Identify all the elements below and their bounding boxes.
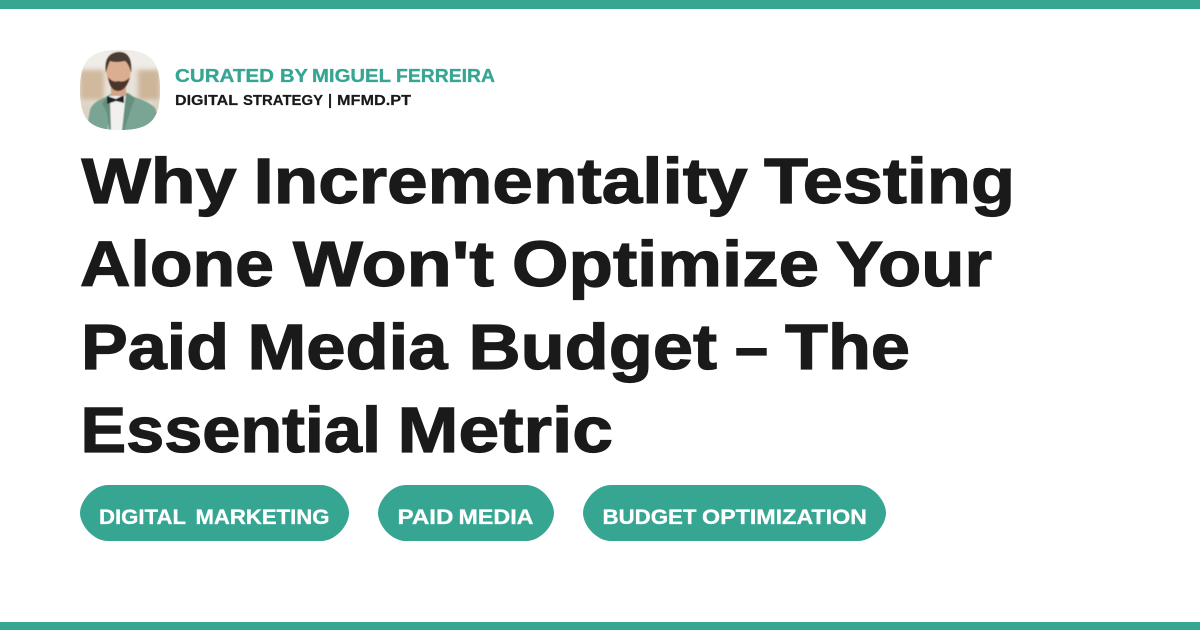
title: The [785,311,910,383]
tag: budget optimization: OPTIMIZATION [702,505,867,529]
tag: digital marketing: MARKETING [196,505,330,529]
title: Your [836,228,992,300]
title: Testing [764,145,1015,217]
title: Why [82,145,237,217]
curator name: FERREIRA [396,65,495,86]
top accent bar [0,0,1200,9]
title: Budget [468,311,717,383]
title: Metric [398,394,613,466]
bottom accent bar [0,622,1200,630]
title: Won't [293,228,494,300]
tag: budget optimization [583,485,886,541]
title: Alone [80,228,274,300]
curator name: MIGUEL [312,65,391,86]
curator name [175,65,495,86]
tag: digital marketing: DIGITAL [99,505,186,529]
title: Paid [81,311,229,383]
tag: budget optimization: BUDGET [602,505,696,529]
curator name: CURATED [175,65,274,86]
icon: author portrait [80,50,160,131]
curator role [175,93,411,109]
title: Essential [80,394,381,466]
tag: paid media [378,485,554,541]
tag: digital marketing [80,485,349,541]
curator role: MFMD.PT [337,93,411,109]
curator name: BY [280,65,309,86]
curator role: | [328,93,332,109]
title: – [735,311,768,383]
title: Optimize [512,228,819,300]
tag: paid media: MEDIA [458,505,534,529]
curator role: DIGITAL [175,93,238,109]
title [80,145,1015,466]
title: Incrementality [254,145,748,217]
title: Media [248,311,448,383]
tag: paid media: PAID [398,505,454,529]
curator role: STRATEGY [243,93,323,109]
